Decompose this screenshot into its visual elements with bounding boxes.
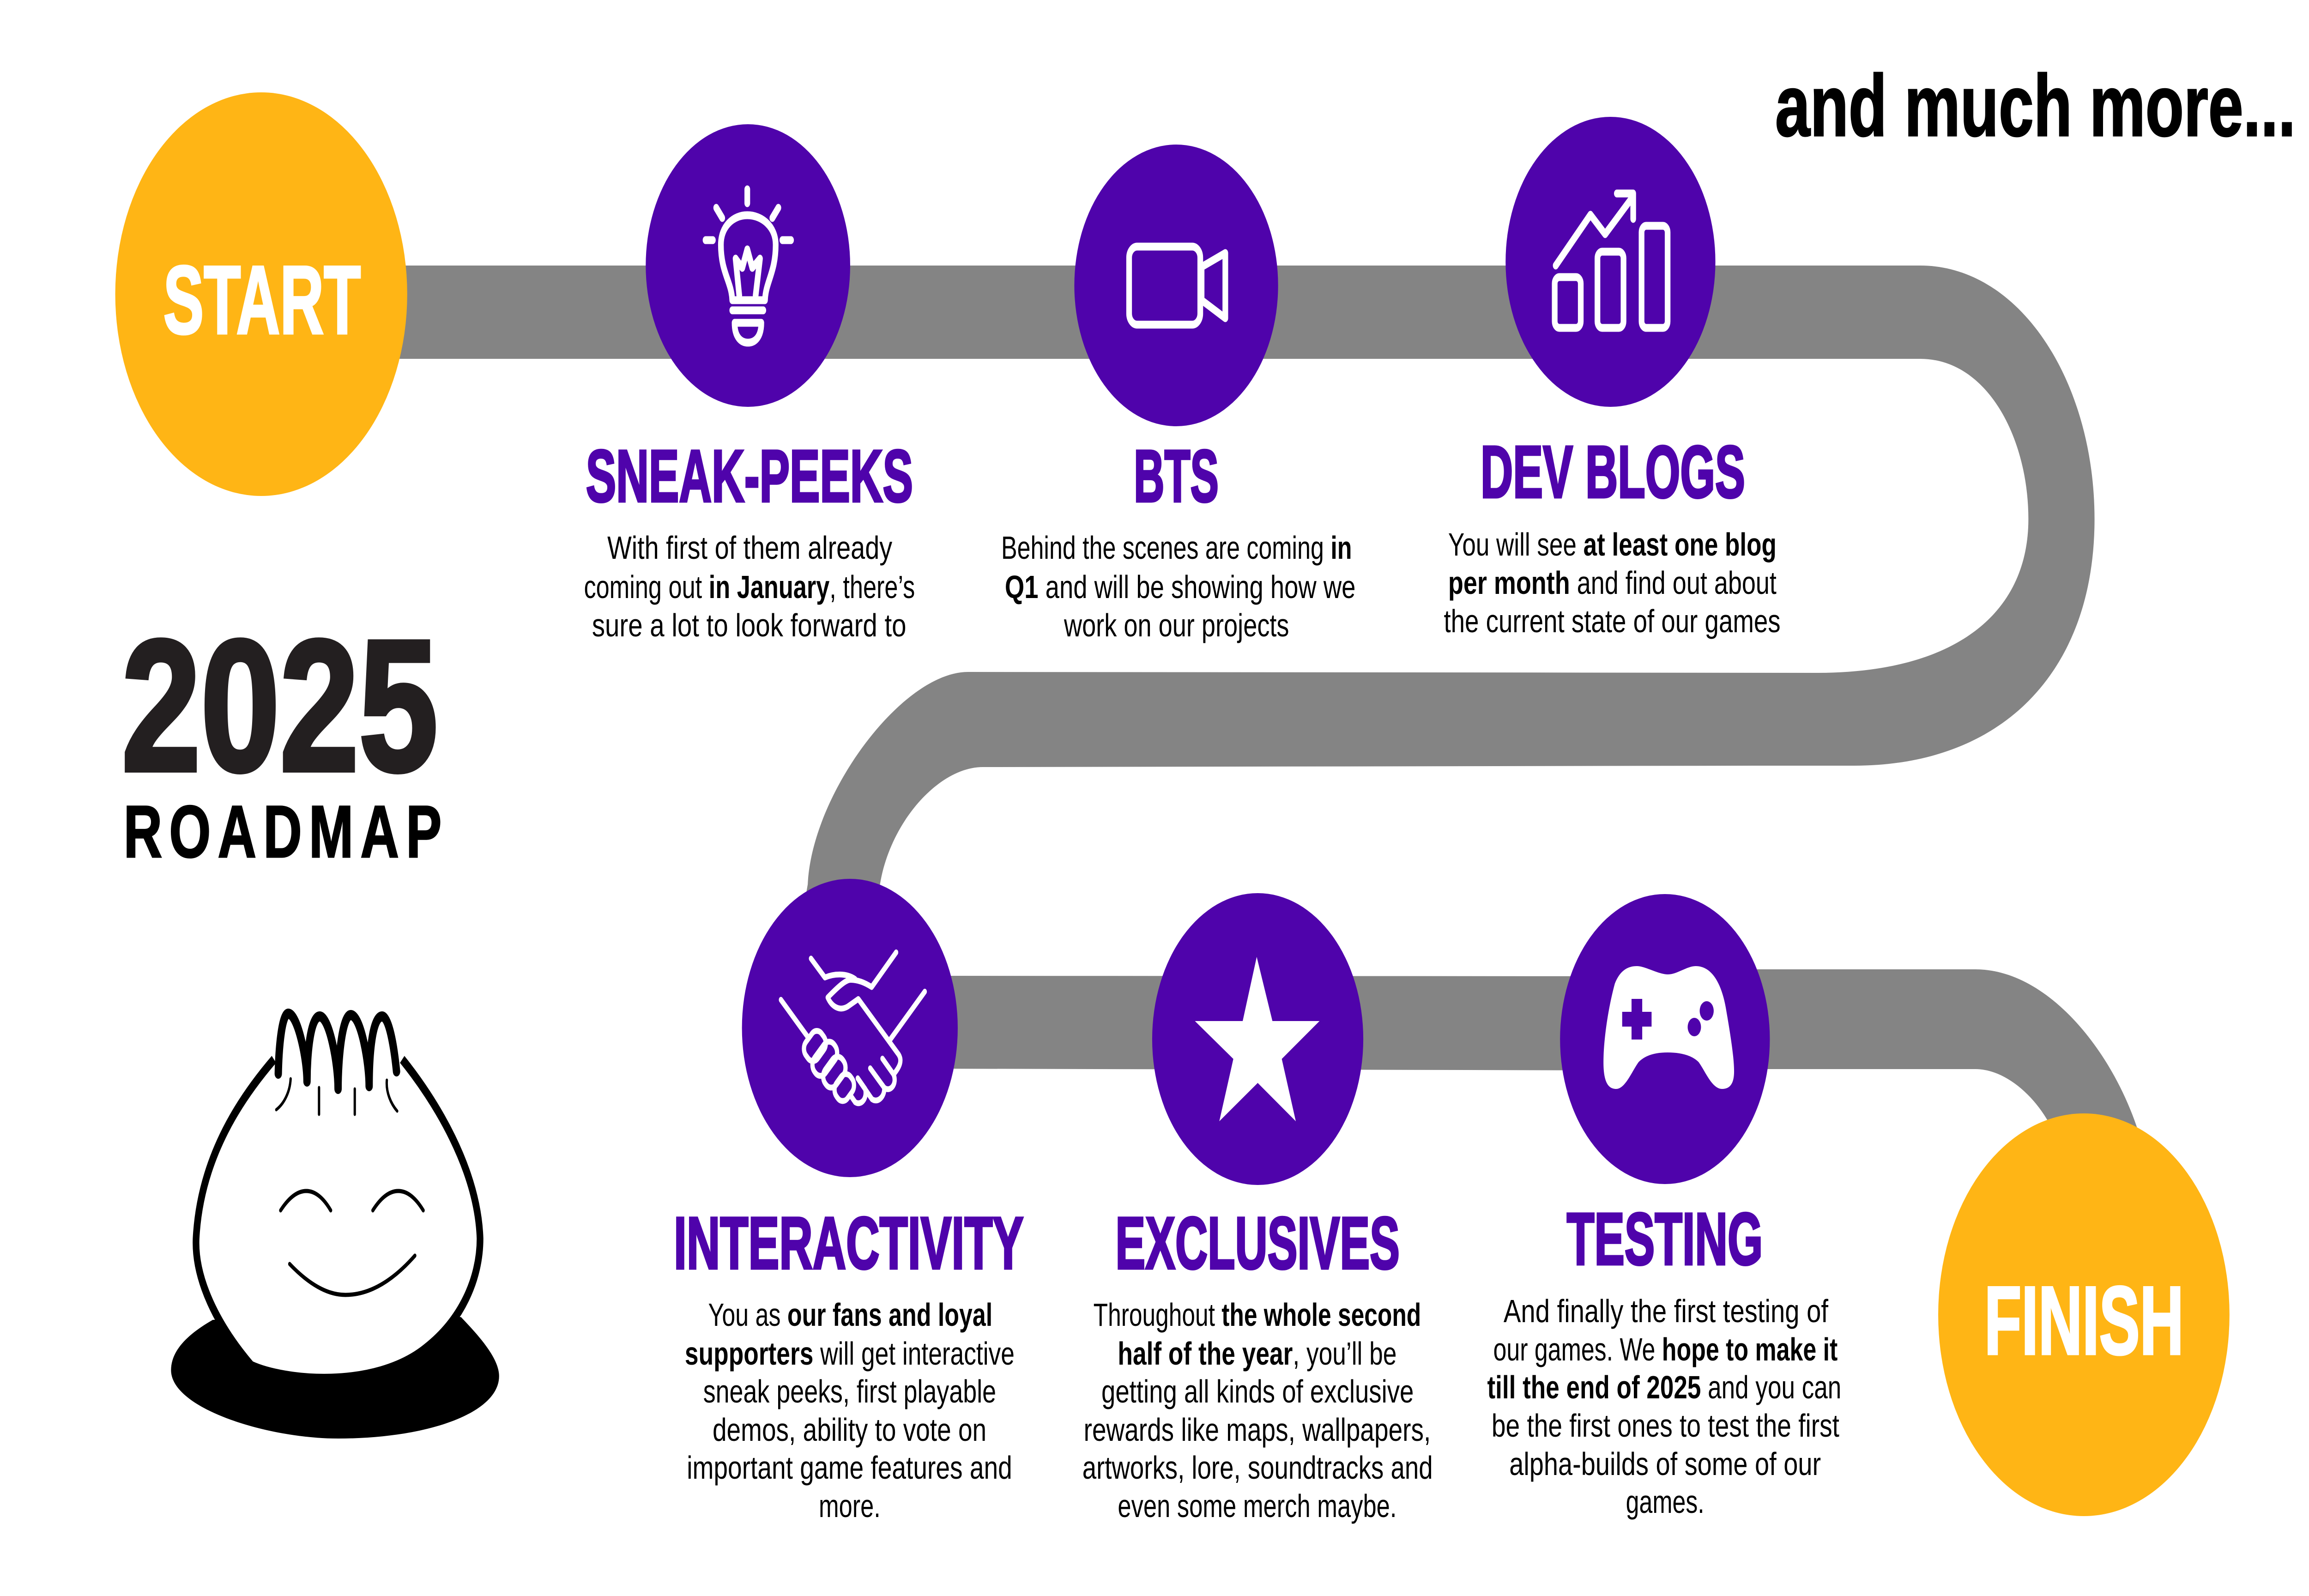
description: With first of them already [607,530,893,566]
description: games. [1626,1484,1705,1520]
finish marker [1938,1113,2230,1516]
description: work on our projects [1064,607,1289,643]
step: interactivity [674,879,1023,1524]
description: You as our fans and loyal [708,1297,992,1333]
description: And finally the first testing of [1504,1293,1829,1329]
description: per month and find out about [1448,565,1777,601]
start marker: START [163,246,361,354]
start marker [115,92,407,496]
description: alpha-builds of some of our [1509,1446,1821,1482]
description: even some merch maybe. [1118,1488,1396,1524]
description: half of the year , you’ll be [1118,1336,1396,1372]
icon: smiling dumpling mascot [171,1014,499,1439]
icon: star [1152,893,1363,1185]
description: Q1 and will be showing how we [1005,569,1355,605]
description: till the end of 2025 and you can [1487,1369,1841,1405]
step: exclusives [1082,893,1433,1524]
icon: video camera [1074,145,1278,426]
title: 2025 roadmap: 2025 [121,601,438,810]
icon: handshake [742,879,958,1177]
description: the current state of our games [1444,603,1781,639]
heading: EXCLUSIVES [1115,1202,1400,1284]
step: sneak-peeks [584,124,915,643]
description [1001,530,1355,643]
icon: light bulb [646,124,850,407]
description [584,530,915,643]
heading: SNEAK-PEEKS [586,435,913,517]
and much more callout: and much more... [1775,57,2296,154]
description: more. [819,1488,881,1524]
description: artworks, lore, soundtracks and [1082,1450,1433,1486]
heading: TESTING [1567,1198,1763,1280]
description [1444,526,1781,639]
description [1082,1297,1433,1524]
description: coming out in January, there’s [584,569,915,605]
description: be the first ones to test the first [1492,1408,1839,1444]
description: demos, ability to vote on [713,1412,986,1448]
description: You will see at least one blog [1448,526,1777,562]
description [1487,1293,1841,1520]
description: Throughout the whole second [1094,1297,1421,1333]
description: sneak peeks, first playable [703,1373,996,1409]
icon: growth chart [1505,117,1716,407]
heading: BTS [1134,435,1219,517]
description: getting all kinds of exclusive [1101,1373,1414,1409]
description: our games. We hope to make it [1493,1331,1838,1367]
step: dev blogs [1444,117,1781,639]
heading: DEV BLOGS [1481,431,1745,513]
road: grey winding path [368,266,2145,1155]
title: 2025 roadmap: ROADMAP [124,791,441,873]
step: BTS [1001,145,1355,643]
step: testing [1487,894,1841,1520]
description: sure a lot to look forward to [592,607,907,643]
finish marker: FINISH [1984,1266,2184,1375]
description: rewards like maps, wallpapers, [1084,1412,1431,1448]
heading: INTERACTIVITY [674,1202,1023,1284]
description [685,1297,1015,1524]
description: important game features and [687,1450,1012,1486]
icon: game controller [1560,894,1770,1184]
description: Behind the scenes are coming in [1001,530,1352,566]
description: supporters will get interactive [685,1336,1015,1372]
